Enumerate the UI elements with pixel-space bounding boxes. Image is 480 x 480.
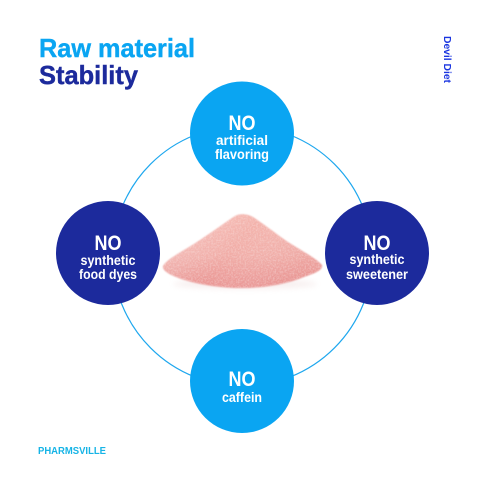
pile light grain texture (163, 214, 322, 288)
pile shadow (173, 279, 317, 289)
circle: no synthetic food dyes: synthetic (80, 253, 136, 268)
circle: no caffein: caffein (222, 390, 262, 405)
circle: no artificial flavoring: NO (228, 112, 256, 135)
circle: no synthetic sweetener: NO (364, 232, 390, 255)
pile body (163, 214, 322, 288)
title line: Stability: Stability (39, 60, 139, 90)
powder pile (163, 214, 322, 289)
title line: Raw material: Raw material (39, 33, 195, 63)
circle: no caffein: NO (228, 368, 256, 391)
circle: no synthetic food dyes (56, 201, 160, 305)
circle: no synthetic food dyes: food dyes (79, 267, 137, 282)
vertical brand label: Devil Diet (441, 36, 452, 84)
circle: no artificial flavoring: flavoring (215, 147, 269, 162)
connecting ring (112, 126, 372, 386)
circle: no caffein (190, 329, 294, 433)
circle: no synthetic sweetener (325, 201, 429, 305)
circle: no synthetic sweetener: synthetic (350, 252, 405, 267)
circle: no artificial flavoring (190, 82, 294, 186)
circle: no synthetic food dyes: NO (94, 232, 122, 255)
circle: no artificial flavoring: artificial (216, 133, 268, 148)
circle: no synthetic sweetener: sweetener (346, 267, 409, 282)
pile dark grain texture (163, 214, 322, 288)
title (39, 33, 195, 90)
footer brand: PHARMSVILLE (38, 445, 106, 457)
